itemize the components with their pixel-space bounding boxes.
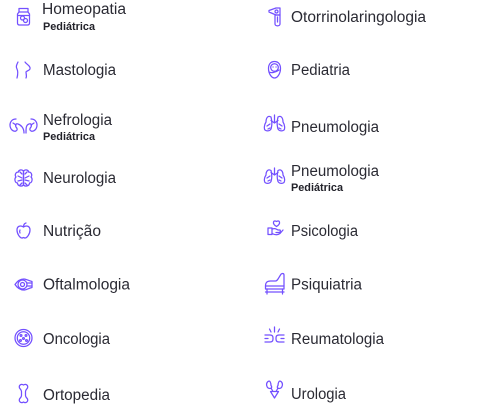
- icon: urinary system: [267, 381, 282, 398]
- icon: torso outline: [16, 62, 30, 78]
- label: Otorrinolaringologia: Otorrinolaringologia: [291, 9, 426, 26]
- item: Neurologia: [15, 170, 116, 187]
- label: Psiquiatria: Psiquiatria: [291, 276, 362, 294]
- label: Pediatria: Pediatria: [291, 62, 350, 79]
- label: Nutrição: Nutrição: [43, 223, 101, 240]
- label: Ortopedia: Ortopedia: [43, 387, 110, 404]
- item: Mastologia: [16, 62, 116, 79]
- icon: lungs: [264, 168, 285, 183]
- label: Homeopatia: Homeopatia: [42, 1, 126, 18]
- item: Otorrinolaringologia: [269, 8, 426, 26]
- label: Pneumologia: Pneumologia: [291, 163, 379, 180]
- item: Reumatologia: [265, 327, 384, 348]
- icon: otoscope: [269, 8, 280, 26]
- item: Oncologia: [15, 330, 110, 348]
- item: Pneumologia Pediátrica: [264, 163, 379, 194]
- label: Pediátrica: Pediátrica: [43, 131, 96, 143]
- item: Pediatria: [268, 62, 350, 79]
- icon: joint: [265, 327, 284, 342]
- label: Pneumologia: Pneumologia: [291, 119, 379, 136]
- label: Mastologia: Mastologia: [43, 62, 116, 79]
- item: Psicologia: [268, 221, 358, 240]
- label: Urologia: Urologia: [291, 386, 346, 403]
- item: Ortopedia: [19, 384, 110, 404]
- label: Nefrologia: Nefrologia: [43, 112, 112, 129]
- item: Homeopatia Pediátrica: [18, 1, 126, 33]
- label: Pediátrica: Pediátrica: [43, 21, 96, 33]
- icon: kidneys: [10, 119, 37, 133]
- icon: swaddled baby: [268, 62, 280, 78]
- item: Nefrologia Pediátrica: [10, 112, 112, 143]
- item: Oftalmologia: [15, 276, 130, 294]
- icon: cell: [15, 330, 32, 346]
- item: Psiquiatria: [266, 274, 362, 294]
- icon: eye: [15, 279, 32, 290]
- item: Nutrição: [17, 223, 101, 240]
- label: Reumatologia: Reumatologia: [291, 331, 384, 348]
- label: Psicologia: Psicologia: [291, 223, 358, 240]
- item: Urologia: [267, 381, 346, 403]
- icon: apple: [17, 223, 30, 238]
- icon: therapy couch: [266, 274, 284, 294]
- item: Pneumologia: [264, 115, 379, 136]
- label: Neurologia: Neurologia: [43, 170, 116, 187]
- label: Oncologia: Oncologia: [43, 331, 110, 348]
- label: Pediátrica: Pediátrica: [291, 182, 344, 194]
- icon: lungs: [264, 115, 285, 131]
- icon: bone: [19, 384, 28, 403]
- icon: medicine jar: [18, 8, 30, 25]
- icon: brain: [15, 170, 32, 186]
- icon: heart in hand: [268, 221, 283, 235]
- label: Oftalmologia: Oftalmologia: [43, 276, 130, 294]
